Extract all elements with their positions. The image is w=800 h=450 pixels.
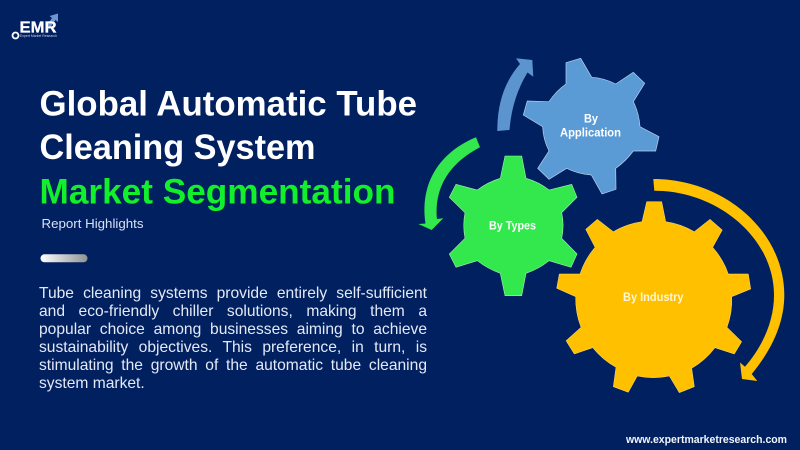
divider pill: [40, 254, 88, 262]
icon: logo ring: [12, 32, 18, 38]
body paragraph: popular choice among businesses aiming to achieve: [39, 321, 427, 338]
gear: By Industry: [557, 202, 751, 393]
label: Application: [560, 126, 621, 140]
arrow: gold: [653, 179, 784, 381]
title: Global Automatic Tube: [40, 84, 417, 124]
body paragraph: stimulating the growth of the automatic tube cleaning: [39, 357, 427, 374]
arrow: blue: [497, 58, 533, 131]
gear: By Application: [523, 58, 659, 194]
logo tagline: Expert Market Research: [20, 34, 57, 38]
icon: logo arrow: [47, 14, 58, 27]
gear: By Types: [449, 156, 577, 296]
body paragraph: and eco-friendly chiller solutions, making them a: [39, 303, 427, 320]
title: [40, 84, 417, 212]
logo wordmark: EMR: [20, 20, 57, 36]
label: [560, 112, 621, 140]
body paragraph: Tube cleaning systems provide entirely self-sufficient: [39, 285, 427, 302]
title highlight: Market Segmentation: [40, 172, 396, 212]
label: By Industry: [623, 290, 684, 304]
arrow: green: [418, 137, 480, 230]
body paragraph: [39, 285, 428, 392]
title: Cleaning System: [40, 127, 316, 167]
body paragraph: sustainability objectives. This preference, in turn, is: [39, 339, 427, 356]
label: By: [584, 112, 598, 126]
label: By Types: [489, 218, 536, 232]
website url: www.expertmarketresearch.com: [625, 434, 787, 446]
logo: EMR: [12, 14, 58, 38]
subtitle: Report Highlights: [42, 217, 144, 231]
body paragraph: system market.: [39, 375, 145, 392]
